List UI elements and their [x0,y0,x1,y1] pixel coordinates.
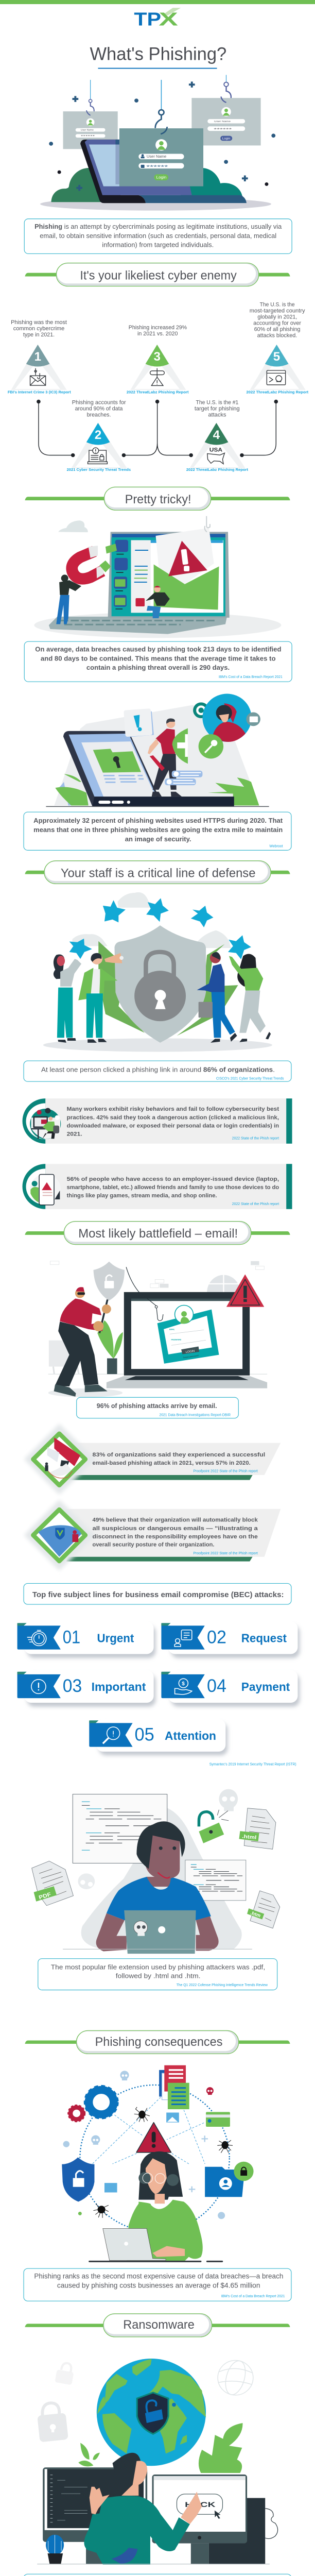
callout: 96% arrive by email: 96% of phishing attacks arrive by email. [97,1402,217,1410]
panel: back left login [63,80,118,149]
callout: breach days [24,641,292,682]
callout: HTTPS phishing sites: Webroot [269,844,283,849]
table line [63,1948,252,1950]
person [84,2453,202,2565]
panel: back right login: User Name [214,120,231,123]
subject line 01 Urgent [18,1621,155,1658]
timeline: connector lines [37,400,277,457]
panel: 83% of organizations: 83% of organizations said they experienced a successful [93,1452,265,1458]
panel: risky behaviors: Many workers exhibit risky behaviors and fail to follow cybersecurity best [67,1106,279,1112]
panel: front login form: User Name [147,155,166,159]
man [96,1821,219,1954]
stat 3: phishing increased 29%: 3 [153,350,161,364]
callout: 96% arrive by email: 2021 Data Breach Investigations Report-DBIR [160,1413,231,1417]
left monitor [43,2467,147,2564]
stat 5: US most targeted country: 5 [273,350,280,364]
panel: 83% of organizations [24,1424,281,1495]
callout: file extensions: followed by .html and .htm. [116,1972,201,1980]
stat 4: US is #1 target: 4 [213,428,220,442]
plant [97,1320,123,1374]
magnet [72,544,117,579]
panel: 49% believe emails blocked: all suspicious or dangerous emails — "illustrating a [93,1526,258,1532]
illustration: hacker fishing a login form on a laptop [48,1261,267,1397]
person: woman in green with star [229,954,271,1042]
callout: phishing definition: Phishing is an attempt by cybercriminals posing as legitimate institutions, usually via [34,223,282,230]
icon: USA map [207,447,224,464]
panel: 49% believe emails blocked: disconnect in the responsibility employees have on the [93,1534,258,1540]
stat 5: US most targeted country [247,302,309,394]
heading: Most likely battlefield - email!: Most likely battlefield – email! [78,1227,238,1241]
icon: phone with alert and worried woman [30,1174,61,1205]
subject line 05 Attention: 05 [135,1724,154,1744]
callout: 86% of organizations: CISCO's 2021 Cyber Security Threat Trends [216,1076,284,1080]
heading: Pretty tricky! [25,487,290,510]
illustration: staff around shield and padlock [43,892,272,1052]
callout: HTTPS phishing sites: means that one in three phishing websites are going the extra mile to maintain [33,826,283,834]
callout: top five subject lines: Top five subject lines for business email compromise (BEC) attacks: [32,1590,284,1599]
callout: breach days: On average, data breaches caused by phishing took 213 days to be identified [35,645,281,653]
callout: breach days: IBM's Cost of a Data Breach Report 2021 [219,674,283,679]
panel: 83% of organizations: Proofpoint 2022 State of the Phish report [193,1468,258,1473]
heading: Ransomware: Ransomware [123,2318,195,2332]
panel: front login form [119,80,203,187]
shield [62,2157,94,2201]
source: Symantec: Symantec's 2019 Internet Security Threat Report (ISTR) [209,1762,296,1767]
laptop and desk [89,2229,223,2262]
icon: person with speech bubble [174,1630,192,1647]
panel: employer-issued devices: smartphone, tablet, etc.) allowed friends and family to use those devices to do [67,1184,279,1191]
panel: 83% of organizations: email-based phishing attack in 2021, versus 57% in 2020. [93,1460,251,1466]
hacker left [56,574,81,624]
stat 4: US is #1 target: target for phishing [195,405,240,412]
subject line 05 Attention: Attention [165,1729,216,1742]
documents [159,2065,189,2109]
file: html [239,1808,276,1849]
stat 1: most common cybercrime: 1 [34,350,41,364]
right monitor [152,2475,247,2564]
code page [73,1794,167,1863]
small icons [63,2071,214,2147]
leaves [78,2423,243,2473]
subject line 01 Urgent: 01 [63,1627,80,1647]
logo: TPX: X [159,9,179,30]
warning sign [226,1274,264,1307]
subject line 03 Important: 03 [63,1675,82,1696]
stat 4: US is #1 target: 2022 ThreatLabz Phishing Report [186,467,248,472]
wire globe [218,2359,253,2397]
panel: risky behaviors: 2022 State of the Phish report [232,1136,279,1141]
callout: breach days: contain a phishing threat overall is 290 days. [86,664,230,671]
callout: phishing definition: information) from targeted individuals. [102,241,214,248]
icon: hand with coin [175,1679,192,1694]
stat 1: most common cybercrime: type in 2021. [23,332,55,338]
panel: 49% believe emails blocked: overall security posture of their organization. [93,1542,214,1548]
hacker centre [135,586,170,618]
top green bar [0,0,315,4]
stat 5: US most targeted country: most-targeted country [250,308,305,314]
right monitor: HACK [185,2501,216,2509]
computer setup and person [37,2453,278,2565]
stat 2: around 90% of data breaches: 2 [95,428,101,442]
stat 2: around 90% of data breaches: breaches. [87,412,111,418]
panel: back left login: User Name [81,129,94,131]
subject line 04 Payment: Payment [241,1680,290,1693]
callout: file extensions [38,1959,277,1990]
icon: diamond with shield [24,1500,95,1571]
heading: Your staff is a critical line of defense [25,861,290,884]
stat 5: US most targeted country: attacks blocked. [257,332,297,338]
gears [68,2086,118,2122]
stat 5: US most targeted country: 60% of all phishing [254,327,301,332]
laptop [80,140,247,203]
panel: risky behaviors: downloaded malware, or exposed their personal data or login credentials) in [67,1123,279,1129]
heading: It's your likeliest cyber enemy: It's your likeliest cyber enemy [80,269,237,283]
shield [93,1262,125,1300]
icon: password field and warning [150,368,164,385]
shield padlock [98,925,238,1043]
title: What's Phishing? [90,44,226,64]
heading: It's your likeliest cyber enemy [25,263,290,286]
subject line 02 Request [161,1621,300,1658]
heading: Your staff is a critical line of defense: Your staff is a critical line of defense [61,867,255,880]
person: man with briefcase [197,952,237,1043]
heading: Ransomware [25,2314,290,2337]
icon: magnifier with alert [103,1727,120,1743]
icon: laptop and lock alert [88,448,107,464]
heading: Phishing consequences [25,2030,290,2054]
icon: gear [193,702,209,718]
callout: second most expensive: caused by phishing costs businesses an average of $4.65 million [57,2281,260,2289]
stat 3: phishing increased 29%: Phishing increased 29% [129,325,187,331]
callout: second most expensive: IBM's Cost of a Data Breach Report 2021 [221,2294,285,2298]
stat 3: phishing increased 29%: 2022 ThreatLabz Phishing Report [127,389,189,394]
illustration: hooks phishing login forms on a laptop [40,75,275,211]
file: html: .html [242,1834,257,1841]
icon: diamond with screens [24,1424,95,1495]
subject line 04 Payment [161,1670,300,1707]
logo: TPX [134,8,181,30]
callout: 96% arrive by email [77,1397,238,1418]
panel: employer-issued devices: 2022 State of the Phish report [232,1201,279,1206]
callout: 86% of organizations [24,1061,291,1081]
illustration: man with laptop, malicious file types [73,1789,276,1954]
subject line 03 Important [18,1670,155,1707]
alert card [124,708,154,737]
laptop [63,731,234,806]
panel: back right login: ****** [214,127,232,131]
panel: front login form: Login [156,176,166,180]
stat 1: most common cybercrime: common cybercrime [13,326,64,332]
spiders [93,2107,233,2218]
stat 4: US is #1 target: The U.S. is the #1 [196,400,238,405]
cactus [46,2535,64,2564]
panel: back right login: Login [222,138,230,141]
woman [127,2151,203,2261]
stat 2: around 90% of data breaches [67,400,131,472]
subject line 04 Payment: 04 [207,1675,226,1696]
code page right [185,1860,246,1901]
icon: stopwatch [27,1631,46,1646]
callout: 58% paid ransom [24,2574,291,2576]
logo: TPX: TP [134,9,161,30]
hacker with fishing rod [54,1287,111,1397]
person: woman with star [54,954,81,1043]
callout: HTTPS phishing sites: an image of security. [125,835,191,843]
file: pdf: PDF [38,1891,52,1901]
login card on hook: EMAIL [169,1329,175,1331]
icon: browser with skull [267,370,286,385]
warning triangle [136,2123,171,2153]
stat 3: phishing increased 29% [127,325,189,394]
callout: second most expensive: Phishing ranks as the second most expensive cause of data breaches—a breach [34,2272,283,2280]
icon: hand with coin: $ [182,1681,185,1687]
login card on hook [157,1306,219,1364]
stat 5: US most targeted country: globally in 2021, [257,314,297,320]
envelope with warning [154,516,219,610]
stat 1: most common cybercrime: FBI's Internet Crime 3 (IC3) Report [8,389,71,394]
panel: risky behaviors [23,1098,292,1144]
card [206,2112,230,2127]
skull sticker [134,1921,147,1936]
callout: HTTPS phishing sites [24,812,291,850]
stat 2: around 90% of data breaches: around 90% of data [75,405,123,412]
file: htm: .htm [250,1910,261,1919]
callout: HTTPS phishing sites: Approximately 32 percent of phishing websites used HTTPS during 2020. That [33,817,283,824]
panel: 49% believe emails blocked [24,1500,281,1571]
subject line 01 Urgent: Urgent [97,1632,134,1645]
icon: hacker and worker at a desk [30,1108,61,1139]
lock and skull [199,1789,238,1843]
illustration: hackers stealing files from a laptop [34,516,281,638]
callout: breach days: and 80 days to be contained. This means that the average time it takes to [41,654,276,662]
globe [207,1265,240,1293]
stat 2: around 90% of data breaches: 2021 Cyber Security Threat Trends [67,467,131,472]
callout: phishing definition [24,219,292,253]
login card on hook: Forgot password? [183,1354,199,1359]
panel: front login form: ****** [146,164,168,170]
heading: Phishing consequences: Phishing consequences [95,2035,222,2049]
heading: Most likely battlefield - email! [25,1222,290,1245]
subject line 05 Attention [89,1719,227,1755]
panel: employer-issued devices: things like play games, stream media, and shop online. [67,1193,217,1199]
illustration: woman at laptop surrounded by threats [62,2065,254,2261]
heading: Pretty tricky!: Pretty tricky! [125,493,191,506]
panel: back right login [191,75,261,145]
person: man with megaphone [78,953,124,1043]
panel: risky behaviors: practices. 42% said they took a dangerous action (clicked a malicious link, [67,1114,279,1121]
folder [205,2162,254,2197]
globe [97,2359,206,2466]
file: pdf [32,1861,95,1906]
laptop [107,1292,267,1388]
background locks [37,2363,74,2442]
stat 1: most common cybercrime: Phishing was the most [11,319,67,326]
stat 4: US is #1 target: attacks [208,412,226,418]
stars [69,898,251,959]
callout: phishing definition: email, to obtain sensitive information (such as credentials, personal data, medical [40,232,276,240]
login card on hook: LOGIN [185,1350,195,1354]
stat 5: US most targeted country: accounting for over [253,320,301,327]
panel: risky behaviors: 2021. [67,1131,82,1137]
panel: employer-issued devices [23,1164,292,1209]
panel: back left login: ****** [81,134,95,138]
stat 4: US is #1 target [186,400,248,472]
illustration: defender with shield and hacker avatar [46,694,269,807]
stat 1: most common cybercrime [8,319,71,394]
subject line 02 Request: Request [241,1632,287,1645]
callout: second most expensive [24,2268,291,2301]
panel: 49% believe emails blocked: Proofpoint 2022 State of the Phish report [193,1551,258,1555]
callout: file extensions: The Q1 2022 Cofense Phishing Intelligence Trends Review [177,1982,268,1987]
stat 5: US most targeted country: 2022 ThreatLabz Phishing Report [247,389,309,394]
tower [209,2498,265,2564]
icon: exclamation circle [31,1680,46,1693]
stat 2: around 90% of data breaches: Phishing accounts for [72,400,126,405]
panel: 49% believe emails blocked: 49% believe that their organization will automatically block [93,1517,258,1523]
callout: 86% of organizations: At least one person clicked a phishing link in around 86% of organizations. [41,1066,275,1073]
login card on hook: PASSWORD [171,1338,181,1341]
icon: key [199,734,223,758]
icon: USA map: USA [209,447,223,453]
stat 5: US most targeted country: The U.S. is the [260,302,295,308]
illustration: hacker at computers in front of a globe [37,2359,253,2473]
defender [148,718,188,796]
stat 3: phishing increased 29%: in 2021 vs. 2020 [137,331,178,337]
hacker portrait [202,694,252,742]
callout: top five subject lines [24,1583,291,1604]
subject line 03 Important: Important [92,1680,146,1693]
callout: file extensions: The most popular file extension used by phishing attackers was .pdf, [51,1963,265,1971]
subject line 02 Request: 02 [207,1627,226,1647]
panel: employer-issued devices: 56% of people who have access to an employer-issued device (laptop, [67,1176,279,1182]
icon: envelope and hook [30,368,46,385]
file: htm [247,1891,280,1928]
